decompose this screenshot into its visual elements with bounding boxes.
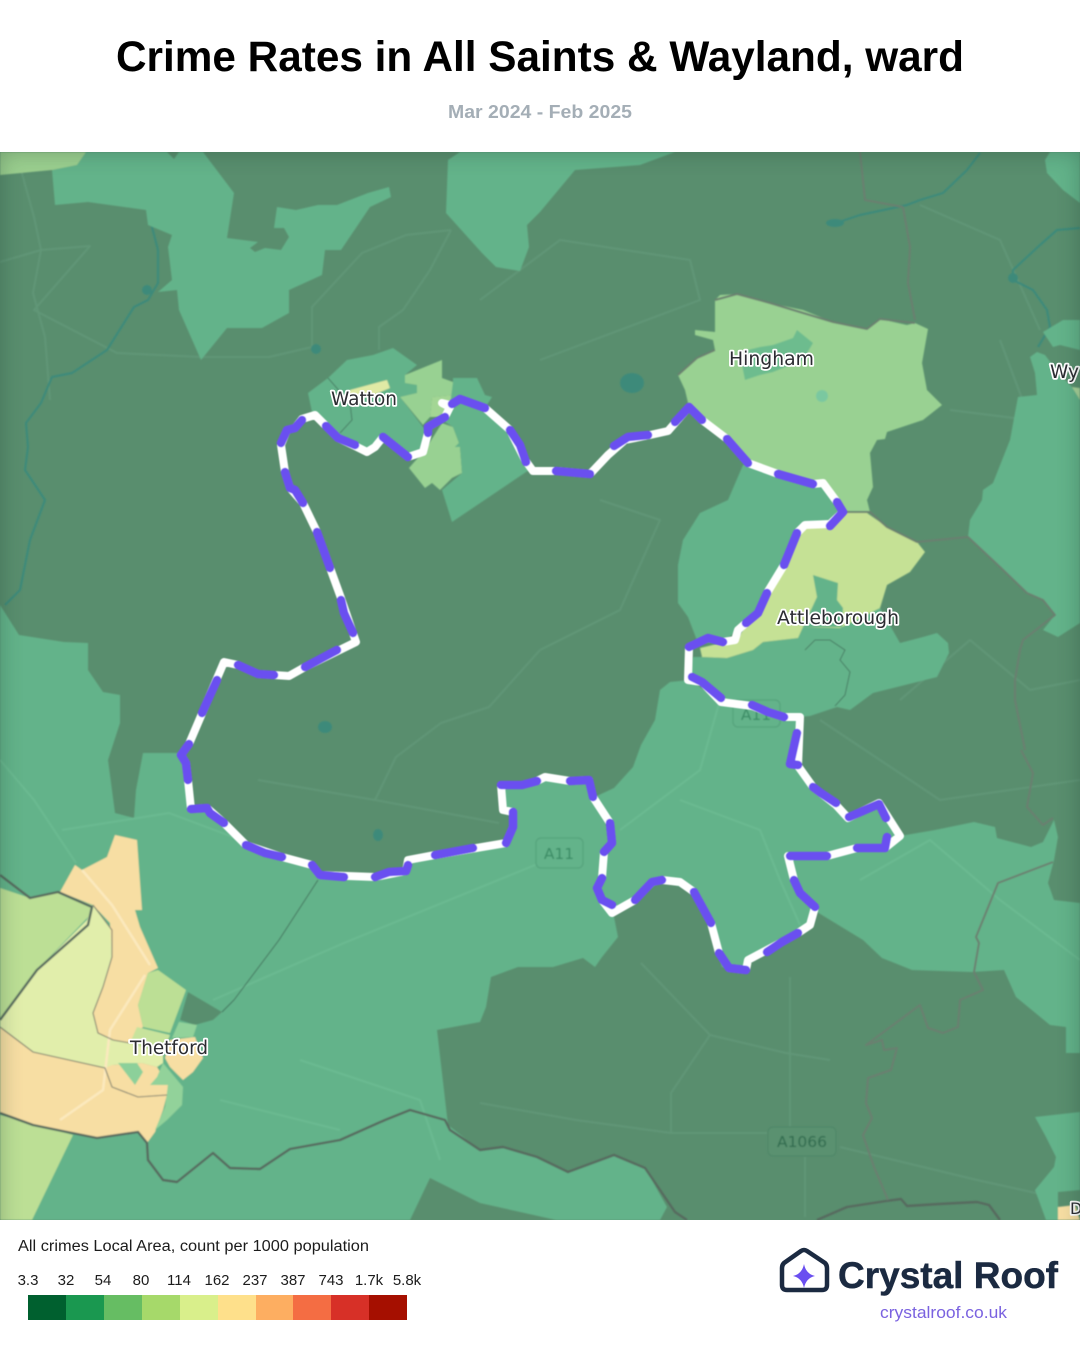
place labels: Hingham (729, 349, 814, 370)
region: Thetford wards (0, 835, 222, 1220)
legend scale labels: 3.3 (18, 1272, 38, 1289)
region: Hingham ward (678, 294, 942, 512)
legend scale labels: 743 (318, 1272, 344, 1289)
road label: A11 east: A11 (741, 706, 771, 724)
legend scale labels: 80 (133, 1272, 149, 1289)
legend scale labels: 162 (204, 1272, 230, 1289)
legend (18, 1238, 422, 1320)
region: top-left light ward (0, 152, 86, 175)
district boundary lines (0, 152, 1055, 1220)
road label: A11 east (733, 700, 780, 727)
logo url: crystalroof.co.uk (880, 1304, 1008, 1322)
legend title: All crimes Local Area, count per 1000 population (18, 1238, 369, 1255)
place labels: Watton (331, 389, 397, 410)
region: north-centre ward (446, 152, 675, 271)
legend scale labels (18, 1272, 422, 1289)
legend scale labels: 5.8k (393, 1272, 422, 1289)
region: north-west ward (52, 152, 391, 360)
place labels: Wy (1050, 362, 1079, 383)
water: rivers and ponds (5, 153, 1080, 841)
road label: A1066 (777, 1136, 826, 1148)
road label: A1066: A1066 (777, 1133, 827, 1151)
legend scale labels: 387 (280, 1272, 306, 1289)
ward boundary: All Saints & Wayland (181, 399, 900, 970)
panel: crime choropleth map (0, 152, 1080, 1220)
subtitle: date range: Mar 2024 - Feb 2025 (448, 101, 632, 122)
region: top-right corner ward (1045, 152, 1080, 203)
region: Attleborough ward (678, 463, 949, 717)
place labels: Attleborough (777, 608, 899, 629)
title: Crime Rates in All Saints & Wayland, ward (116, 33, 964, 81)
place labels: Thetford (129, 1038, 208, 1059)
region: Watton wards (308, 348, 532, 522)
icon: house with star (782, 1250, 827, 1290)
logo wordmark: Crystal Roof (838, 1255, 1059, 1296)
legend scale labels: 54 (95, 1272, 111, 1289)
legend scale labels: 1.7k (355, 1272, 384, 1289)
legend colour bar (28, 1295, 407, 1320)
road label: A11 west (536, 838, 583, 868)
legend scale labels: 32 (58, 1272, 74, 1289)
legend scale labels: 114 (167, 1272, 191, 1289)
road label: A11 west: A11 (544, 845, 574, 863)
place labels (129, 349, 1080, 1218)
region: east wards (968, 320, 1080, 1220)
map regions and base features (0, 152, 1080, 1220)
logo: Crystal Roof (782, 1250, 1059, 1322)
region: mid-band wards (south band around the A11) (0, 605, 1080, 1220)
legend scale labels: 237 (242, 1272, 268, 1289)
